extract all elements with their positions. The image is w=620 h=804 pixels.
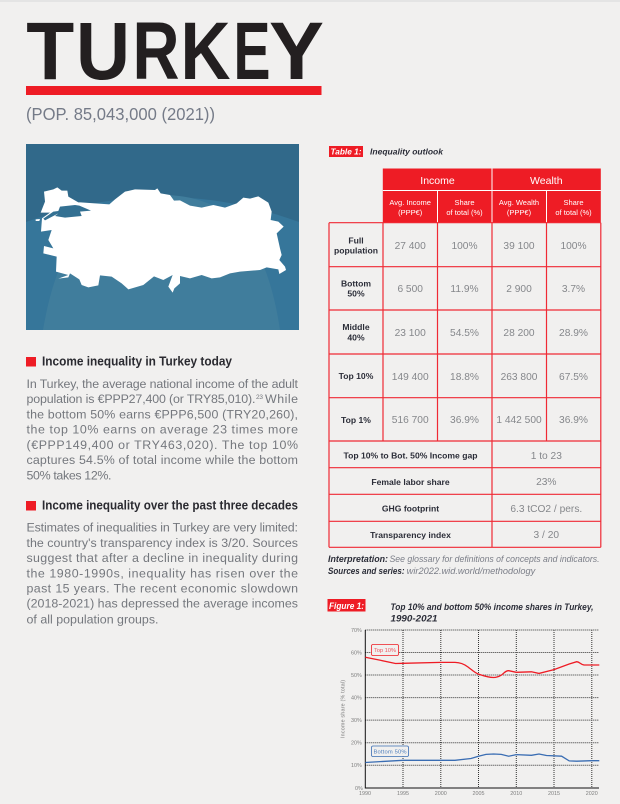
table label: [329, 146, 444, 157]
table values: 100%: [560, 241, 587, 252]
text block: three decades: the country's transparency index is 3/20. Sources: [26, 536, 298, 550]
text block: income inequality today: population is €PPP27,400 (or TRY85,010).: [26, 392, 256, 406]
text block: income inequality today: 50% takes 12%.: [26, 468, 112, 482]
table values: 39 100: [503, 241, 535, 252]
x axis labels: 1990: [359, 791, 371, 797]
text block: income inequality today: While: [265, 392, 298, 406]
table values: [392, 241, 588, 541]
x axis labels: 1995: [397, 791, 409, 797]
table header: of total (%): [555, 208, 592, 217]
legend: bottom 50%: Bottom 50%: [374, 749, 406, 755]
text block: income inequality today: the top 10% earns on average 23 times more: [26, 423, 298, 437]
text block: income inequality today: In Turkey, the average national income of the adult: [26, 377, 299, 391]
text block: three decades: Estimates of inequalities in Turkey are very limited:: [26, 521, 298, 535]
table values: 54.5%: [450, 328, 479, 339]
table values: 6.3 tCO2 / pers.: [510, 504, 582, 515]
x axis labels: 2000: [435, 791, 447, 797]
table values: 3.7%: [562, 284, 585, 295]
figure title: 1990-2021: [390, 614, 438, 624]
table values: 263 800: [501, 372, 538, 383]
y axis labels: 60%: [351, 650, 362, 656]
y axis labels: 30%: [351, 718, 362, 724]
figure label: Figure 1:: [329, 601, 364, 612]
table row labels: Top 10% to Bot. 50% Income gap: [343, 450, 478, 460]
table row labels: 40%: [347, 333, 365, 343]
table notes: See glossary for definitions of concepts and indicators.: [390, 554, 600, 564]
text block: three decades: suggest that after a decline in inequality during: [26, 551, 298, 565]
y axis labels: 50%: [351, 673, 362, 679]
heading: three decades: Income inequality over the past three decades: [42, 499, 298, 513]
title: E: [234, 6, 270, 97]
table row labels: [334, 235, 478, 540]
table notes: wir2022.wid.world/methodology: [407, 566, 537, 576]
title: T: [26, 6, 74, 97]
table values: 1 to 23: [531, 451, 562, 462]
x axis labels: [359, 791, 598, 797]
table header: (PPP€): [398, 208, 423, 217]
table header: [383, 168, 601, 222]
table values: 36.9%: [559, 415, 588, 426]
text block: income inequality today: (€PPP149,400 or TRY463,020). The top 10%: [26, 438, 298, 452]
table values: 3 / 20: [534, 530, 559, 541]
text block: income inequality today: [26, 377, 299, 482]
x axis labels: 2015: [548, 791, 560, 797]
table row labels: Female labor share: [371, 477, 450, 487]
table values: 36.9%: [450, 415, 479, 426]
line chart: [340, 628, 599, 797]
table values: 23 100: [395, 328, 426, 339]
table notes: Sources and series:: [328, 566, 404, 576]
table values: 18.8%: [450, 372, 479, 383]
y axis labels: 10%: [351, 763, 362, 769]
y axis labels: Income share (% total): [340, 680, 346, 738]
table header: Share: [454, 198, 475, 207]
table values: 6 500: [397, 284, 423, 295]
table header: (PPP€): [507, 208, 532, 217]
table header: Income: [420, 175, 455, 187]
title: Y: [269, 6, 324, 97]
y axis labels: 0%: [355, 786, 363, 792]
table values: 149 400: [392, 372, 429, 383]
table values: 27 400: [395, 241, 426, 252]
table row labels: 50%: [347, 289, 365, 299]
x axis labels: 2010: [510, 791, 522, 797]
x axis labels: 2020: [586, 791, 598, 797]
text block: income inequality today: 23: [256, 394, 263, 401]
text block: three decades: past 15 years. The recent economic slowdown: [26, 582, 298, 596]
table row labels: Top 1%: [341, 415, 371, 425]
y axis labels: [340, 628, 363, 792]
table values: 28 200: [503, 328, 535, 339]
title: [26, 6, 324, 97]
y axis labels: 40%: [351, 696, 362, 702]
table values: 100%: [451, 241, 478, 252]
text block: three decades: of all population groups.: [26, 613, 158, 627]
text block: income inequality today: captures 54.5% of total income while the bottom: [26, 453, 298, 467]
legend: top 10%: [372, 644, 398, 656]
table header: Share: [563, 198, 584, 207]
table row labels: population: [334, 245, 378, 255]
map panel: [26, 144, 299, 330]
table row labels: Transparency index: [370, 530, 451, 540]
title: K: [180, 6, 230, 97]
table label: Inequality outlook: [370, 146, 444, 156]
table header: Wealth: [530, 175, 563, 187]
text block: income inequality today: the bottom 50% earns €PPP6,500 (TRY20,260),: [26, 407, 298, 421]
table values: 1 442 500: [496, 415, 542, 426]
x axis labels: 2005: [472, 791, 484, 797]
y axis labels: 20%: [351, 740, 362, 746]
figure title: Top 10% and bottom 50% income shares in Turkey,: [390, 602, 594, 613]
text block: three decades: [26, 521, 298, 627]
figure title: [390, 602, 594, 624]
subtitle: population: (POP. 85,043,000 (2021)): [26, 104, 215, 124]
table row labels: Middle: [342, 322, 370, 332]
table row labels: Bottom: [341, 279, 371, 289]
table values: 2 900: [506, 284, 532, 295]
table values: 11.9%: [450, 284, 479, 295]
table values: 23%: [536, 477, 556, 488]
legend: top 10%: Top 10%: [374, 648, 396, 654]
heading: income inequality today: Income inequality in Turkey today: [42, 355, 232, 369]
table notes: Interpretation:: [328, 554, 388, 564]
table row labels: Top 10%: [339, 371, 374, 381]
table grid: [329, 223, 601, 547]
table values: 516 700: [392, 415, 429, 426]
title: U: [76, 6, 130, 97]
table label: Table 1:: [330, 146, 362, 156]
legend: bottom 50%: [372, 746, 408, 756]
table row labels: Full: [348, 235, 364, 245]
table header: Avg. Income: [389, 198, 431, 207]
y axis labels: 70%: [351, 628, 362, 634]
table row labels: GHG footprint: [382, 503, 439, 513]
table header: Avg. Wealth: [499, 198, 539, 207]
table notes: [328, 554, 600, 576]
line: top 10%: [365, 657, 599, 678]
title: R: [132, 6, 180, 97]
text block: three decades: the 1980-1990s, inequality has risen over the: [26, 567, 298, 581]
line: bottom 50%: [365, 754, 599, 762]
icon: Turkey silhouette: [36, 187, 286, 293]
table values: 67.5%: [559, 372, 588, 383]
table: inequality outlook: [329, 168, 601, 547]
table header: of total (%): [446, 208, 483, 217]
table values: 28.9%: [559, 328, 588, 339]
text block: three decades: (2018-2021) has depressed the average incomes: [26, 597, 298, 611]
